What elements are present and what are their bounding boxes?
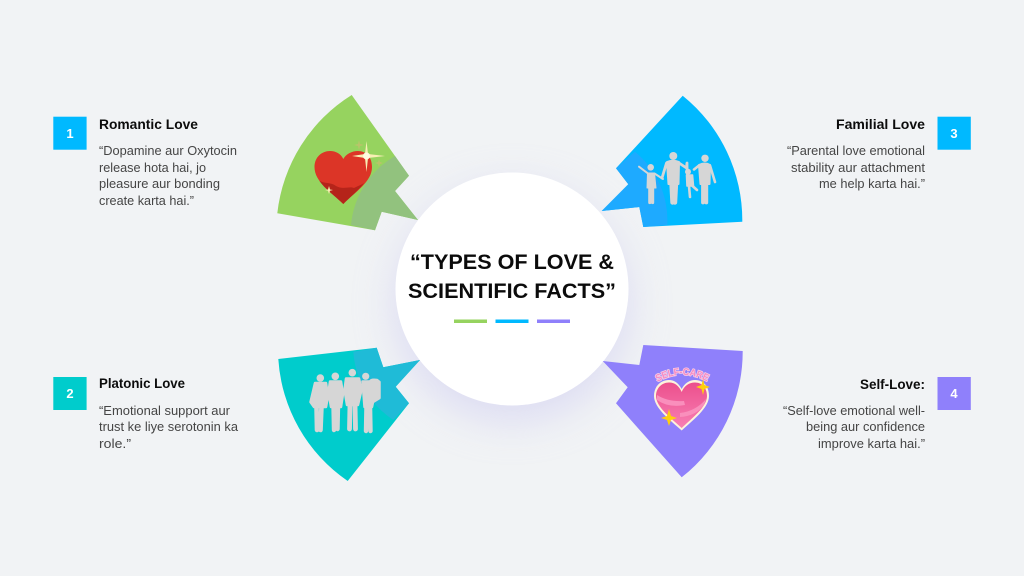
- title: [408, 250, 616, 303]
- text block: familial love: stability aur attachment: [791, 161, 926, 175]
- text block: romantic love: Romantic Love: [99, 117, 198, 132]
- title: “TYPES OF LOVE &: [410, 250, 614, 274]
- text block: familial love: [787, 117, 926, 191]
- text block: platonic love: role.”: [99, 437, 131, 451]
- number badge 4: [938, 377, 971, 410]
- icon: red heart: [314, 140, 385, 204]
- number badge 1: 1: [66, 126, 74, 141]
- text block: familial love: “Parental love emotional: [787, 144, 925, 158]
- text block: platonic love: Platonic Love: [99, 376, 185, 391]
- icon: self-care heart: [654, 367, 710, 430]
- text block: romantic love: create karta hai.”: [99, 194, 194, 208]
- panel: familial love petal: [602, 96, 742, 227]
- panel: self-love petal: [602, 345, 743, 478]
- text block: self-love: being aur confidence: [806, 420, 925, 434]
- panel: platonic love petal: [278, 348, 420, 481]
- title colour bars: [454, 320, 570, 323]
- number badge 4: 4: [950, 386, 958, 401]
- number badge 1: [53, 117, 87, 150]
- text block: familial love: me help karta hai.”: [819, 177, 925, 191]
- text block: platonic love: [99, 376, 238, 451]
- text block: familial love: Familial Love: [836, 117, 926, 132]
- text block: self-love: Self-Love:: [860, 377, 925, 392]
- text block: self-love: [783, 377, 925, 451]
- text block: self-love: “Self-love emotional well-: [783, 404, 925, 418]
- panel: romantic love petal: [277, 95, 418, 230]
- icon: friends silhouette: [310, 369, 380, 431]
- text block: platonic love: trust ke liye serotonin ka: [99, 420, 238, 434]
- text block: romantic love: release hota hai, jo: [99, 161, 206, 175]
- icon: family silhouette: [639, 152, 715, 202]
- number badge 3: [938, 117, 971, 150]
- title: SCIENTIFIC FACTS”: [408, 279, 616, 303]
- number badge 3: 3: [950, 126, 958, 141]
- center circle: [394, 172, 630, 422]
- number badge 2: 2: [66, 386, 74, 401]
- icon: self-care heart: SELF-CARE: [654, 367, 710, 382]
- text block: platonic love: “Emotional support aur: [99, 404, 230, 418]
- text block: romantic love: “Dopamine aur Oxytocin: [99, 144, 237, 158]
- text block: self-love: improve karta hai.”: [818, 437, 925, 451]
- text block: romantic love: pleasure aur bonding: [99, 177, 220, 191]
- number badge 2: [53, 377, 87, 410]
- text block: romantic love: [99, 117, 237, 208]
